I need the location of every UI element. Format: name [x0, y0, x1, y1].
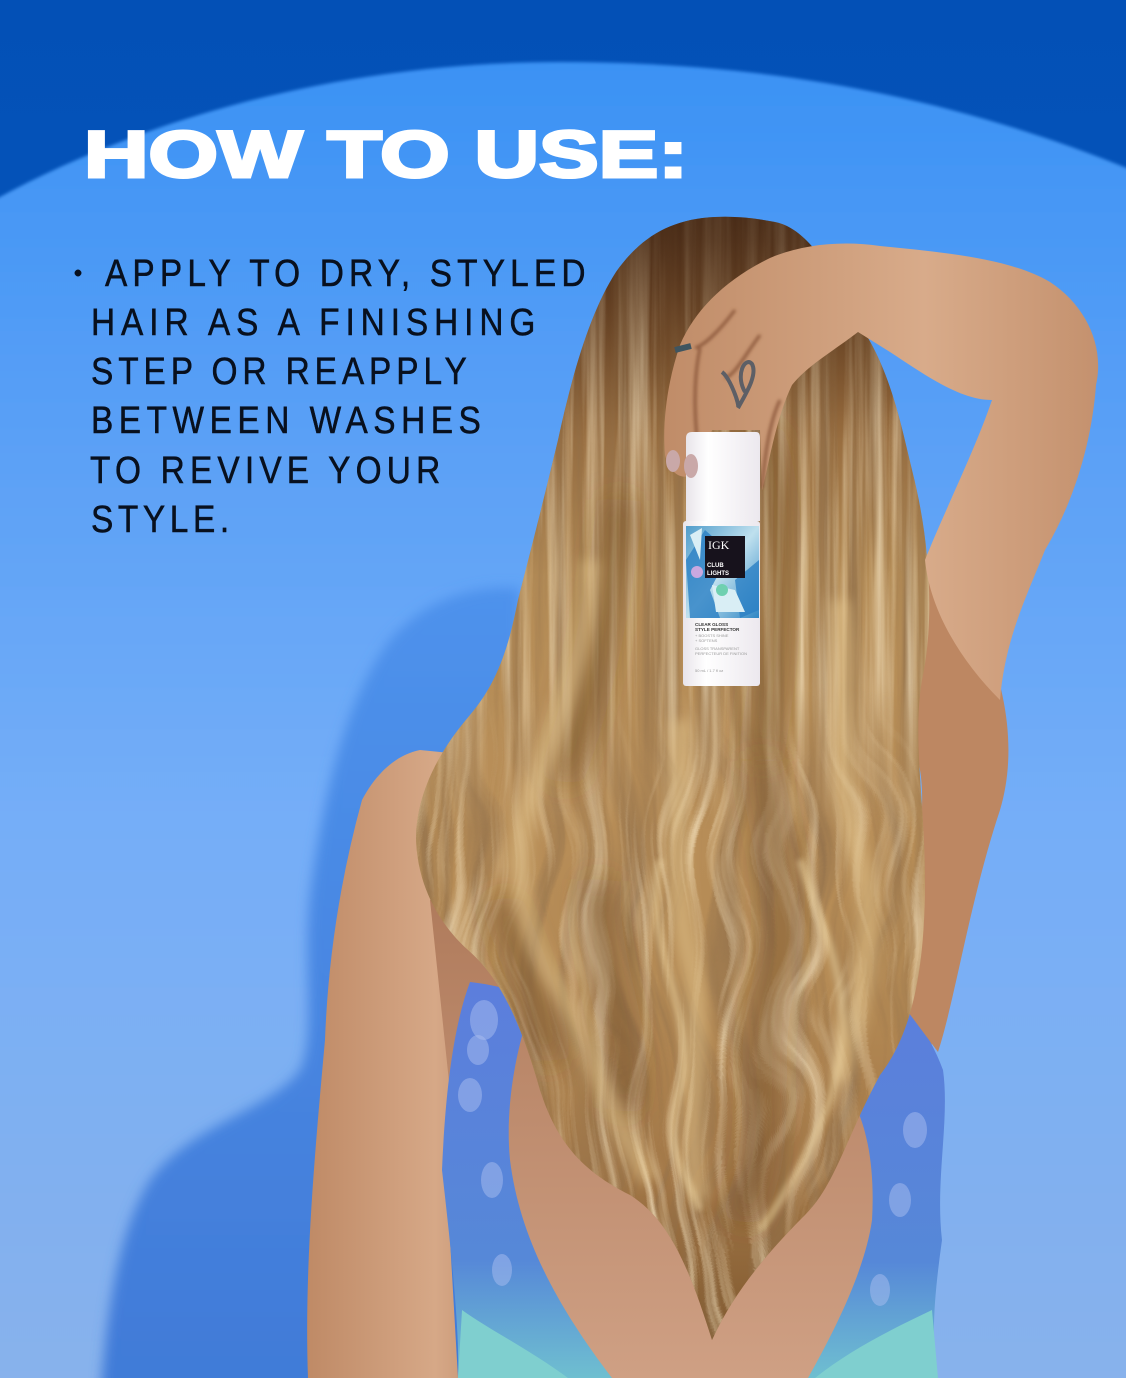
club lights text: LIGHTS	[707, 571, 729, 577]
club lights text: CLUB	[707, 563, 724, 569]
line 5: TO REVIVE YOUR	[90, 449, 440, 491]
bullet	[75, 270, 81, 276]
product description: CLEAR GLOSS	[695, 622, 728, 627]
bottle cap	[686, 432, 760, 521]
model figure	[307, 200, 1098, 1378]
product small print: 50 mL / 1.7 fl oz	[695, 668, 723, 673]
left arm and shoulder	[307, 750, 458, 1378]
line 1: APPLY TO DRY, STYLED	[105, 252, 585, 294]
label artwork	[686, 526, 759, 618]
black logo box	[705, 536, 745, 578]
dress left panel	[442, 982, 612, 1378]
dress sequins	[458, 1000, 927, 1306]
product small print: GLOSS TRANSPARENT	[695, 646, 740, 651]
line 4: BETWEEN WASHES	[91, 399, 481, 441]
title: HOW TO USE:	[84, 117, 688, 191]
dress teal hem	[458, 1310, 938, 1378]
product small print: PERFECTEUR DE FINITION	[695, 651, 747, 656]
bottle body	[683, 521, 760, 686]
bare back	[430, 780, 935, 1378]
finger and knuckle shading	[695, 310, 780, 488]
instruction text	[75, 252, 585, 540]
dress right panel	[808, 990, 945, 1378]
product small print: + SOFTENS	[695, 638, 718, 643]
line 6: STYLE.	[91, 498, 229, 540]
product description: STYLE PERFECTOR	[695, 627, 740, 632]
model shadow on wall	[98, 588, 520, 1378]
raised right arm and hand	[664, 243, 1098, 700]
line 2: HAIR AS A FINISHING	[91, 301, 535, 343]
logo text: IGK	[708, 538, 730, 552]
right side of back and underarm	[910, 581, 1008, 1052]
hair texture	[400, 200, 940, 1350]
product bottle	[666, 432, 760, 686]
product small print: + BOOSTS SHINE	[695, 633, 729, 638]
hair mass	[400, 200, 940, 1350]
line 3: STEP OR REAPPLY	[91, 350, 467, 392]
rings	[675, 346, 754, 408]
fingernails on cap	[666, 450, 698, 478]
